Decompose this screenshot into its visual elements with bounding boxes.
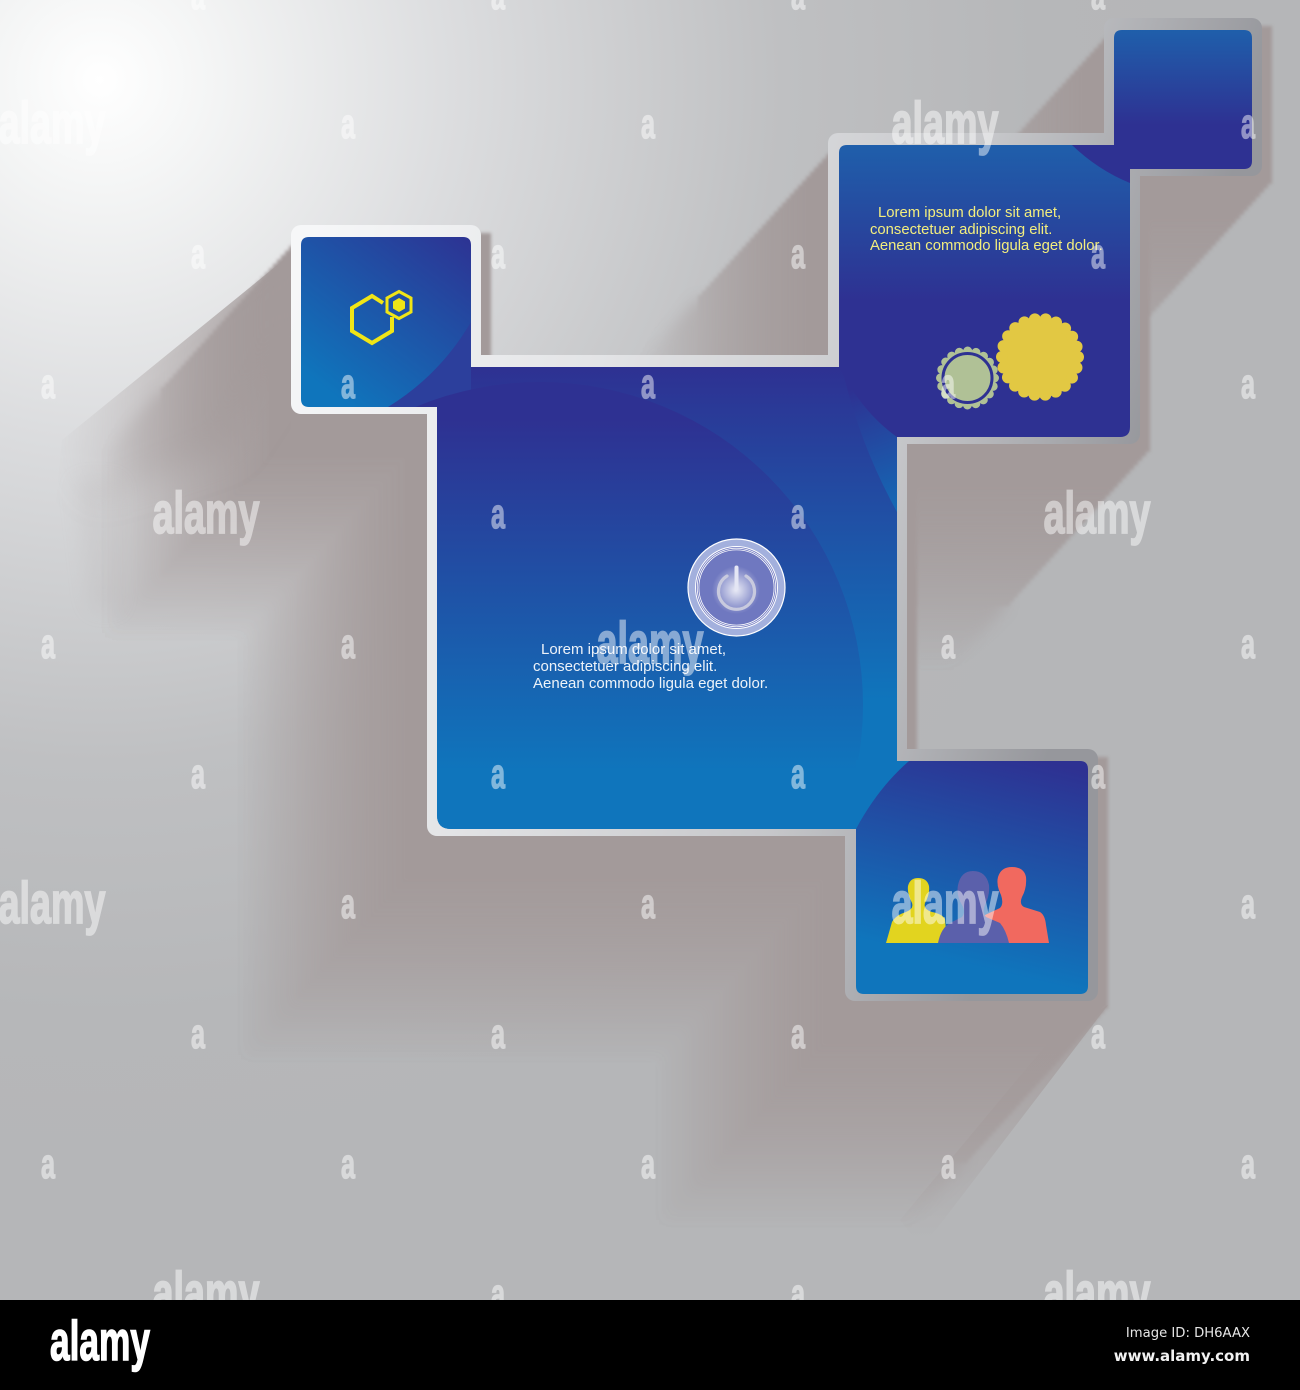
watermarks: alamy xyxy=(1044,482,1150,546)
icon: yellow gear xyxy=(1002,319,1078,395)
watermarks: a xyxy=(1241,102,1256,148)
watermarks: a xyxy=(941,1142,956,1188)
text block: central panel copy: Aenean commodo ligula eget dolor. xyxy=(533,675,768,692)
watermarks: a xyxy=(791,232,806,278)
text block: upper-right panel copy: consectetuer adipiscing elit. xyxy=(870,222,1052,238)
watermarks: a xyxy=(1241,362,1256,408)
watermarks: a xyxy=(1091,752,1106,798)
shadow edge: lower-right wedge xyxy=(900,1005,1108,1248)
panel: lower-right square xyxy=(856,761,1088,994)
watermarks: a xyxy=(341,1142,356,1188)
watermarks: a xyxy=(641,102,656,148)
text block: central panel copy: consectetuer adipiscing elit. xyxy=(533,658,717,675)
long cast shadow xyxy=(116,25,1273,1194)
blue panels group xyxy=(301,30,1252,994)
watermarks: a xyxy=(491,1012,506,1058)
watermarks: a xyxy=(791,492,806,538)
footer bar xyxy=(0,1300,1300,1390)
panel: top-left square xyxy=(301,237,471,407)
shadow edge: soft left fade patch xyxy=(75,480,120,610)
watermarks: a xyxy=(341,362,356,408)
watermarks: a xyxy=(941,362,956,408)
watermarks: a xyxy=(341,882,356,928)
text block: upper-right panel copy: Lorem ipsum dolor sit amet, xyxy=(878,205,1061,221)
watermarks: a xyxy=(791,752,806,798)
watermarks: alamy xyxy=(892,872,998,936)
shadow edge: upper-left wedge xyxy=(88,268,274,486)
watermarks: a xyxy=(1241,1142,1256,1188)
watermarks: alamy xyxy=(153,482,259,546)
watermarks: a xyxy=(191,1012,206,1058)
icon: gears xyxy=(940,319,1078,405)
watermarks: a xyxy=(41,362,56,408)
watermarks: a xyxy=(941,622,956,668)
watermarks: a xyxy=(791,1272,806,1318)
text block: upper-right panel copy: Aenean commodo ligula eget dolor. xyxy=(870,238,1103,254)
icon: hexagons xyxy=(352,292,411,343)
watermarks: alamy xyxy=(0,92,105,156)
footer logo: alamy xyxy=(50,1310,150,1372)
watermarks: a xyxy=(491,752,506,798)
watermarks: a xyxy=(491,232,506,278)
watermarks: alamy xyxy=(153,1262,259,1326)
watermarks: alamy xyxy=(0,872,105,936)
watermarks: a xyxy=(641,1142,656,1188)
watermarks: a xyxy=(1241,622,1256,668)
watermarks: a xyxy=(641,362,656,408)
watermarks: a xyxy=(1241,882,1256,928)
panel: central square base xyxy=(437,367,897,829)
icon: three people xyxy=(886,867,1049,943)
watermarks: a xyxy=(491,1272,506,1318)
watermarks: a xyxy=(1091,1012,1106,1058)
watermarks: a xyxy=(41,1142,56,1188)
panel: central dark circle xyxy=(416,390,909,829)
watermarks: a xyxy=(491,492,506,538)
watermarks: alamy xyxy=(597,612,703,676)
footer url: www.alamy.com xyxy=(1114,1347,1250,1365)
watermarks: a xyxy=(341,622,356,668)
watermarks: alamy xyxy=(1044,1262,1150,1326)
panel: top-corner small square xyxy=(1114,30,1252,169)
watermarks: a xyxy=(41,622,56,668)
footer image id: Image ID: DH6AAX xyxy=(1126,1326,1250,1341)
watermarks: a xyxy=(191,232,206,278)
icon: power button xyxy=(688,539,785,636)
watermarks: a xyxy=(1091,232,1106,278)
watermarks: a xyxy=(791,1012,806,1058)
text block: central panel copy: Lorem ipsum dolor sit amet, xyxy=(541,641,726,658)
watermarks: alamy xyxy=(892,92,998,156)
stepped frame border xyxy=(301,28,1252,991)
icon: green gear xyxy=(940,351,994,405)
panel: upper-right square xyxy=(839,145,1130,512)
watermarks: a xyxy=(341,102,356,148)
watermarks: a xyxy=(191,752,206,798)
watermarks: a xyxy=(641,882,656,928)
